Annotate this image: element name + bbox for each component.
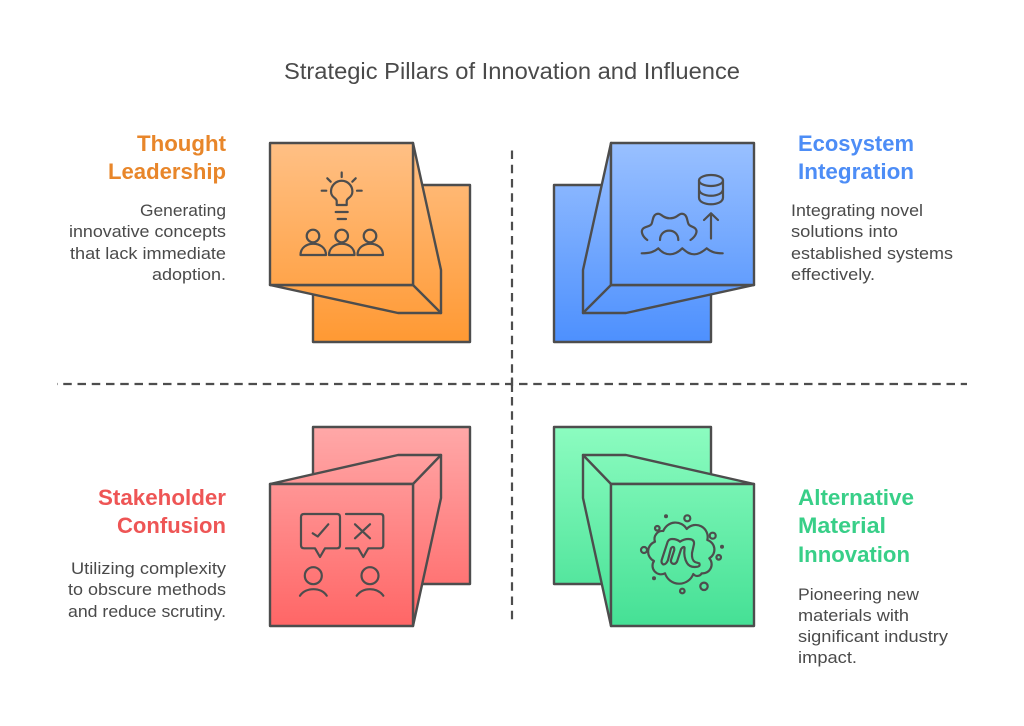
text block: ecosystem integration: solutions into	[791, 222, 898, 241]
text block: alternative material innovation: significant industry	[798, 627, 949, 646]
icon: gear, waves, arrow and database	[642, 175, 723, 254]
text block: alternative material innovation: Material	[798, 513, 886, 538]
text block: stakeholder confusion: Stakeholder	[98, 485, 226, 510]
text block: thought leadership: that lack immediate	[70, 244, 226, 263]
text block: ecosystem integration: effectively.	[791, 265, 875, 284]
horizontal dashed divider	[57, 383, 967, 385]
text block: stakeholder confusion: and reduce scrutiny.	[68, 602, 226, 621]
panel: thought leadership graphic	[270, 143, 470, 342]
text block: ecosystem integration: Ecosystem	[798, 131, 914, 156]
panel: stakeholder confusion graphic	[270, 427, 470, 626]
icon: light bulb over three people	[300, 172, 383, 255]
panel: alternative material innovation graphic	[554, 427, 754, 626]
text block: thought leadership: adoption.	[152, 265, 226, 284]
text block: stakeholder confusion	[68, 485, 227, 621]
text block: alternative material innovation: materials with	[798, 606, 909, 625]
text block: ecosystem integration: established systems	[791, 244, 953, 263]
text block: alternative material innovation: Innovation	[798, 542, 910, 567]
panel: ecosystem integration graphic	[554, 143, 754, 342]
text block: thought leadership: Generating	[140, 201, 226, 220]
icon: two people with check and cross speech bubbles	[300, 514, 383, 596]
text block: alternative material innovation: Pioneering new	[798, 585, 920, 604]
text block: thought leadership	[69, 131, 226, 284]
text block: stakeholder confusion: Confusion	[117, 513, 226, 538]
text block: ecosystem integration: Integration	[798, 159, 914, 184]
text block: ecosystem integration: Integrating novel	[791, 201, 923, 220]
title: Strategic Pillars of Innovation and Influence	[284, 58, 740, 84]
text block: thought leadership: innovative concepts	[69, 222, 226, 241]
text block: thought leadership: Leadership	[108, 159, 226, 184]
icon: material blob with bubbles	[641, 515, 721, 593]
text block: stakeholder confusion: to obscure methods	[68, 580, 226, 599]
text block: stakeholder confusion: Utilizing complexity	[71, 559, 227, 578]
text block: alternative material innovation: impact.	[798, 648, 857, 667]
text block: alternative material innovation: Alternative	[798, 485, 914, 510]
text block: ecosystem integration	[791, 131, 953, 284]
vertical dashed divider	[511, 150, 513, 620]
text block: thought leadership: Thought	[137, 131, 226, 156]
text block: alternative material innovation	[798, 485, 949, 667]
